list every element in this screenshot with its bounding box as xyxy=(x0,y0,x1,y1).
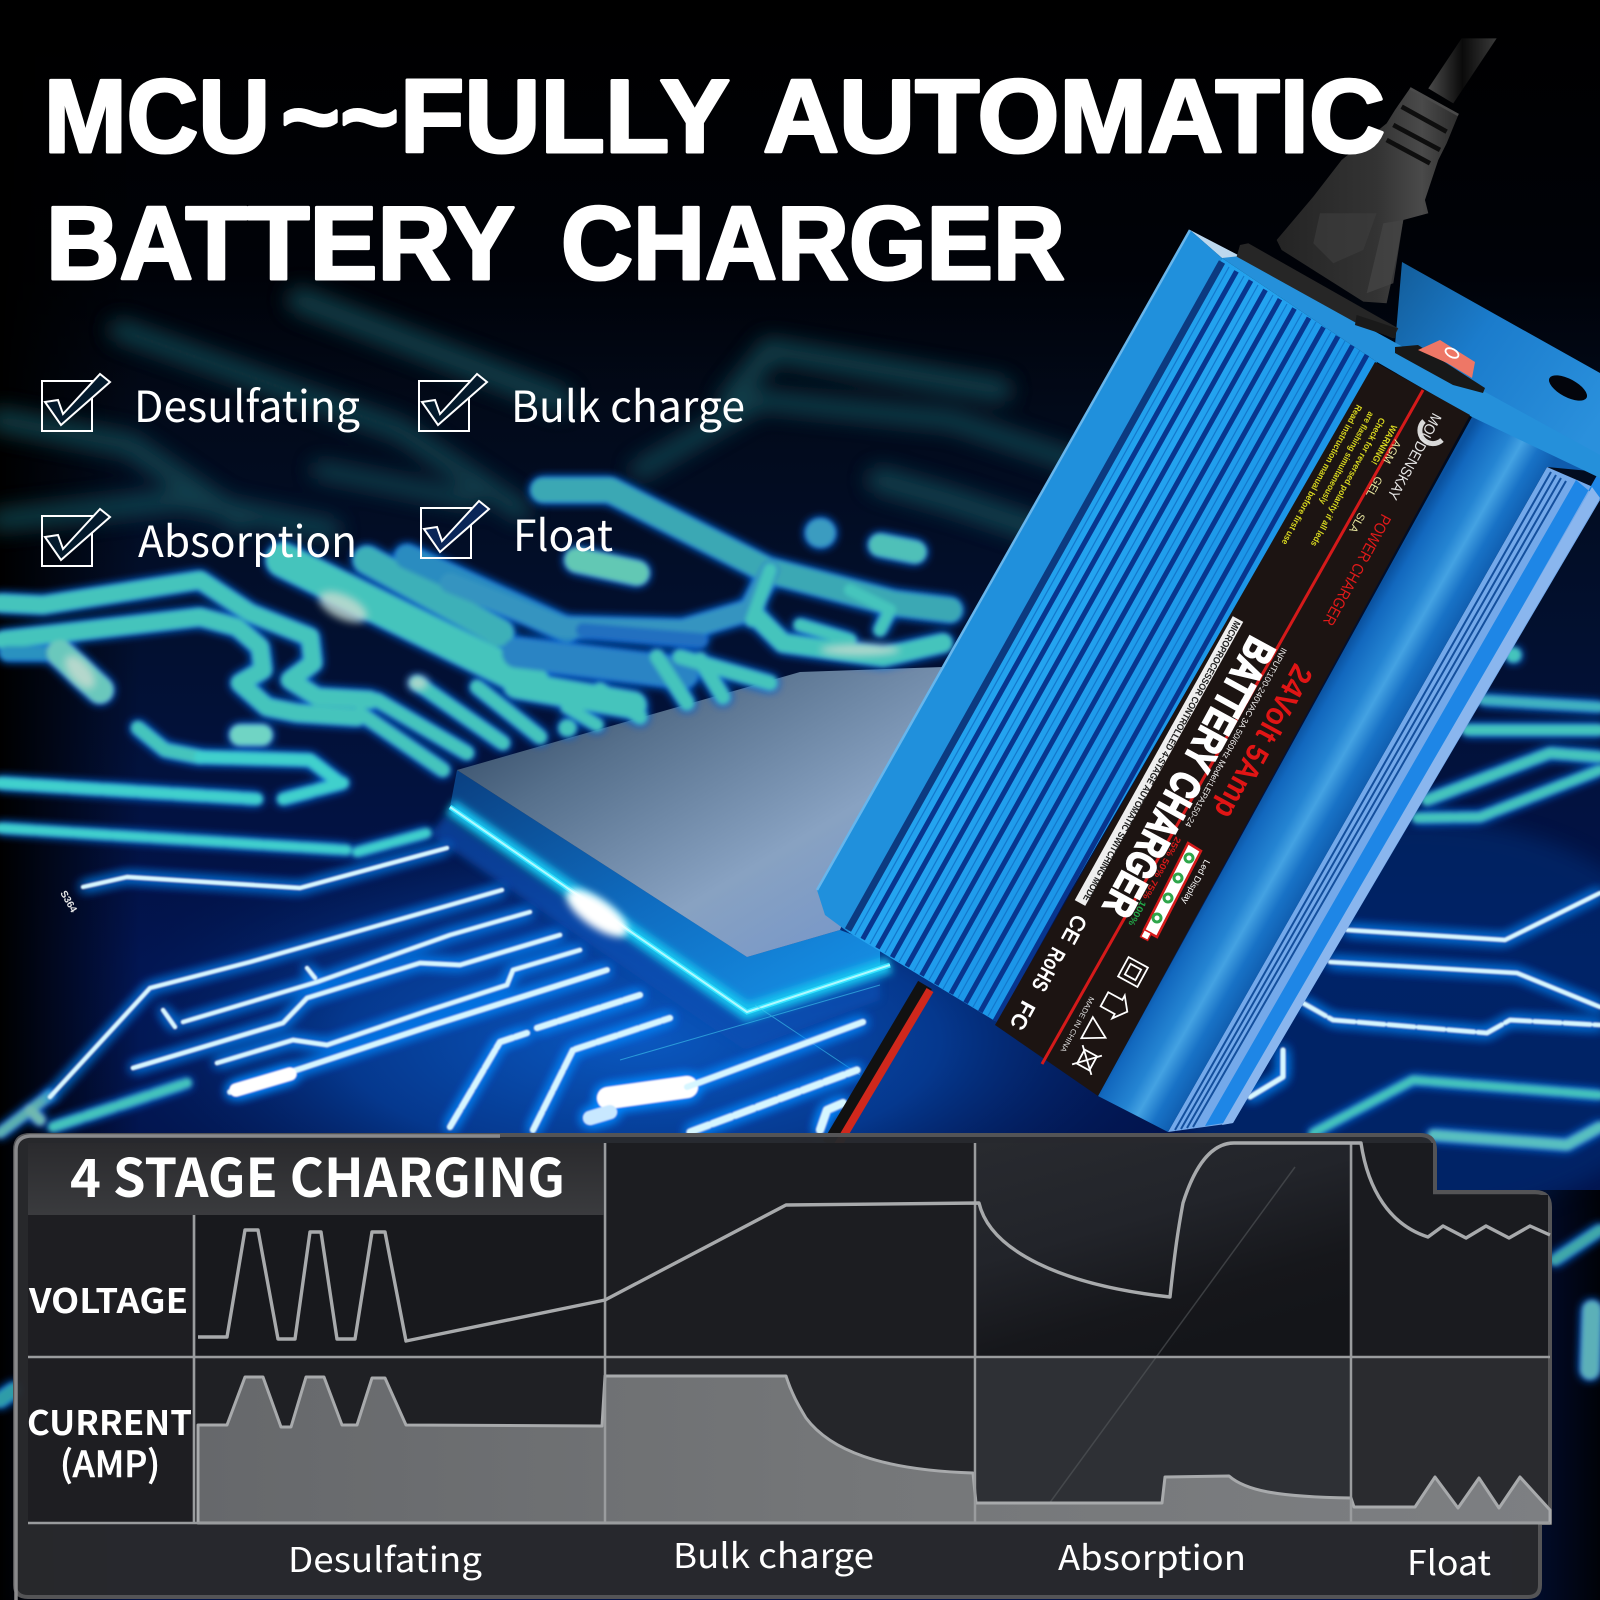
battery types xyxy=(1346,438,1403,535)
mounting flange with slot xyxy=(1395,262,1600,470)
stage labels: Float xyxy=(1407,1536,1491,1585)
panel body xyxy=(15,1135,1550,1597)
certification marks xyxy=(1005,911,1091,1035)
current curve (filled) xyxy=(198,1376,1550,1523)
main title: CHARGER xyxy=(561,186,1065,302)
black label xyxy=(995,362,1470,1096)
warning text: WARNING! xyxy=(1369,423,1399,466)
stage labels: Absorption xyxy=(1058,1531,1246,1580)
warning text xyxy=(1280,403,1399,548)
checklist: Bulk charge: Bulk charge xyxy=(511,373,745,435)
microprocessor band: MICROPROCESSOR CONTROLLED 4-STAGE AUTOMATIC SWITCHING MODE xyxy=(1080,619,1242,903)
faint text on circuit board: S364 xyxy=(57,889,79,915)
main title: BATTERY xyxy=(46,186,515,302)
label red rule xyxy=(1042,390,1423,1064)
certification marks: RoHS xyxy=(1027,943,1071,996)
AC plug and cable xyxy=(1237,38,1497,338)
grid lines xyxy=(28,1143,1550,1523)
stage labels: Bulk charge xyxy=(673,1529,874,1578)
stage labels xyxy=(288,1529,1491,1585)
made in china: MADE IN CHINA xyxy=(1059,995,1096,1054)
battery charger heading: BATTERY CHARGER xyxy=(1094,630,1284,925)
checklist: Float: Float xyxy=(513,502,613,564)
voltage curve xyxy=(198,1143,1550,1341)
outer side strip xyxy=(1168,467,1600,1132)
stage labels: Desulfating xyxy=(288,1533,482,1582)
certification marks: CE xyxy=(1057,911,1091,947)
LED percentages: 25% 50% 75% 100% xyxy=(1126,835,1183,928)
top surface strip xyxy=(1190,230,1600,478)
warning text: are flashing simultaneously xyxy=(1317,410,1376,506)
battery types: GEL xyxy=(1363,474,1384,499)
checklist: Absorption: Absorption xyxy=(138,508,357,570)
checklist: Desulfating: Desulfating xyxy=(134,373,360,435)
main title: ~~ xyxy=(281,59,399,175)
power switch xyxy=(1395,340,1485,393)
LED display xyxy=(1141,843,1201,940)
warning text: Check for reversed polarity if all leds xyxy=(1309,416,1387,548)
charger body xyxy=(817,230,1600,1132)
axis label: current: CURRENT xyxy=(27,1396,192,1445)
background: bright pads on traces xyxy=(59,585,900,694)
checklist: Float xyxy=(421,501,613,564)
rounded rail xyxy=(1098,417,1600,1132)
left axis column xyxy=(28,1215,192,1523)
axis label: voltage: VOLTAGE xyxy=(28,1274,188,1323)
chip xyxy=(430,667,943,1075)
certification marks: FC xyxy=(1005,997,1041,1035)
left rounded band xyxy=(817,230,1222,932)
label logo xyxy=(1420,421,1442,444)
title band xyxy=(28,1143,603,1215)
axis label: current xyxy=(27,1396,192,1488)
secondary groove lines xyxy=(855,267,1360,1016)
panel: 4 stage charging chart xyxy=(15,1135,1550,1600)
chart cells xyxy=(196,1143,1548,1523)
power cable: red and black output wire xyxy=(830,985,930,1145)
voltage and amperage: 24Volt 5Amp xyxy=(1207,659,1320,825)
main title xyxy=(44,59,1385,302)
background: blurred upper circuit traces xyxy=(0,300,1100,530)
background: bright thin circuit lines xyxy=(50,848,1600,1132)
warning text: Read instruction manual before first use xyxy=(1280,403,1364,547)
input spec: INPUT:100-240VAC 3A 50/60Hz Model:LEPA150-24 xyxy=(1183,646,1289,829)
checklist: Absorption xyxy=(42,508,357,570)
background: teal circuit mass xyxy=(0,490,1600,1400)
brand name: MOUDENSKAY xyxy=(1384,410,1444,503)
main title: AUTOMATIC xyxy=(763,59,1385,175)
battery types: AGM xyxy=(1380,438,1403,465)
main title: FULLY xyxy=(400,59,730,175)
label icons xyxy=(1072,957,1148,1075)
chart heading: 4 STAGE CHARGING xyxy=(70,1137,565,1213)
main title: MCU xyxy=(44,59,270,175)
axis label: current: (AMP) xyxy=(60,1436,160,1488)
product type: POWER CHARGER xyxy=(1319,511,1393,628)
LED label: Led Display xyxy=(1180,858,1212,906)
heat sink grooves xyxy=(848,262,1367,1021)
panel rim highlight xyxy=(16,1136,500,1600)
battery types: SLA xyxy=(1346,510,1367,535)
checklist xyxy=(42,373,745,570)
fin face xyxy=(848,258,1377,1021)
